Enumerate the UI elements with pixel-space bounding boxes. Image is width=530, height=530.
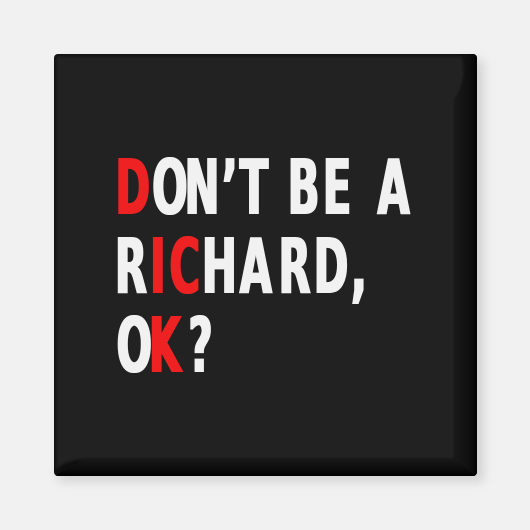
magnet product illustration [54,54,486,484]
drop shadow [58,60,484,482]
bottom bevel [54,459,477,476]
line 1: DON’T BE A [116,143,410,233]
board face [56,56,464,470]
board [54,54,477,476]
slogan text [115,143,410,391]
line 3: OK? [117,301,213,391]
right bevel [455,54,477,476]
line 2: RICHARD, [115,222,367,312]
